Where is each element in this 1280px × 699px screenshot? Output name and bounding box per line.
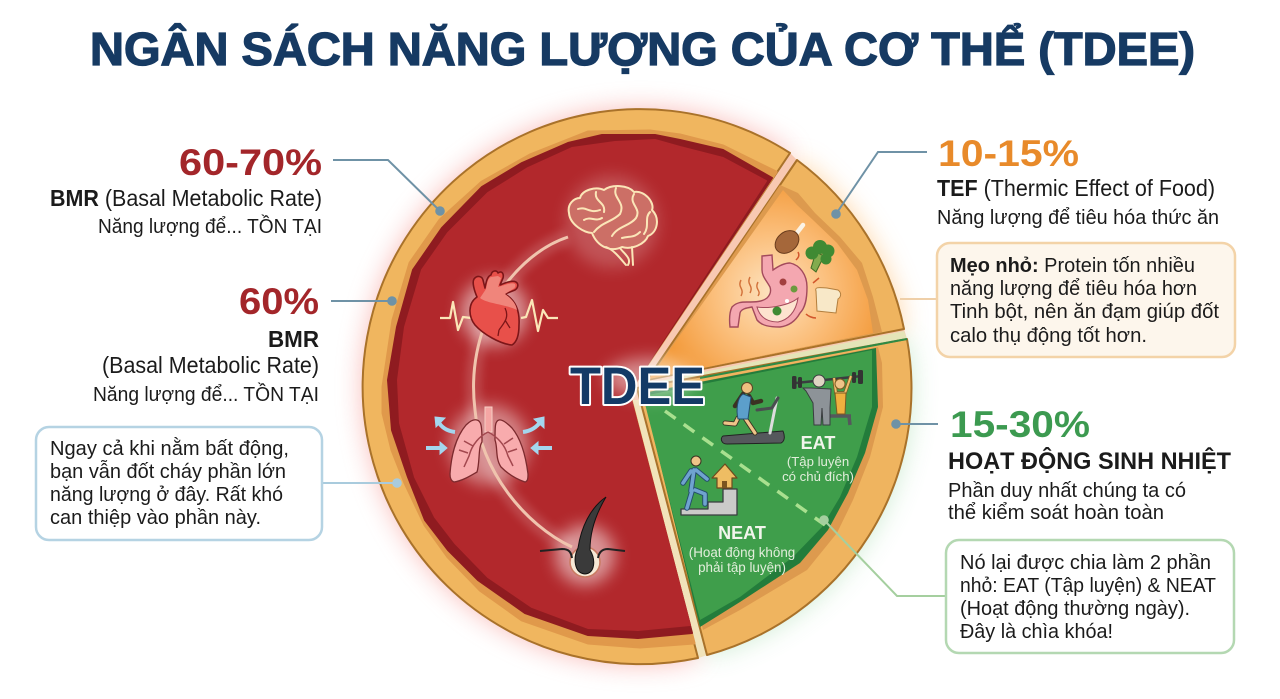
slice: BMR red [363,109,790,664]
callout: blue: can thiệp vào phần này. [50,506,261,529]
callout: orange: Mẹo nhỏ: Protein tốn nhiều [950,254,1195,277]
label: NEAT: (Hoạt động không [689,545,795,560]
icon: lungs [426,407,552,482]
text block: 60-70% BMR [50,141,322,238]
text block: 60-70% BMR: Năng lượng để... TỒN TẠI [98,214,322,238]
callout: orange [937,243,1235,357]
bread [816,288,841,313]
connector: blue box [322,479,401,487]
label: NEAT: NEAT [718,523,766,543]
callout: orange: năng lượng để tiêu hóa hơn [950,277,1197,300]
connector: 10-15% [832,152,927,218]
divider: EAT and NEAT [665,411,825,525]
icon: person on stairs [681,456,737,515]
text block: 10-15% TEF [937,132,1219,229]
slice gaps [629,153,907,658]
text block: 15-30% activity: thể kiểm soát hoàn toàn [948,501,1164,524]
slice: TEF orange [647,160,904,380]
connector: green box [820,516,946,596]
icon: heart with pulse [440,271,558,345]
icon: air arrows [426,417,552,454]
label: NEAT: phải tập luyện) [698,560,786,575]
label: EAT [782,433,854,484]
stomach [730,255,807,327]
callout: blue: Ngay cả khi nằm bất động, [50,437,289,460]
text block: 10-15% TEF: 10-15% [938,132,1079,174]
callout: green: Nó lại được chia làm 2 phần [960,551,1211,574]
label: EAT: có chủ đích) [782,469,854,484]
text block: 60% BMR: (Basal Metabolic Rate) [102,352,319,378]
center label: TDEE: TDEE [570,357,705,416]
text block: 60-70% BMR: BMR (Basal Metabolic Rate) [50,185,322,211]
icon: brain [569,186,657,265]
text block: 60% BMR: BMR [268,326,319,352]
background glow [363,109,911,664]
text block: 15-30% activity [948,403,1231,524]
callout: green: Đây là chìa khóa! [960,620,1113,643]
icon: food and stomach [730,225,841,327]
icon: hair follicle [540,497,625,577]
icon: treadmill runner [721,382,784,444]
icon: weight lifters [792,370,863,425]
chicken leg [771,225,803,258]
connector: orange box [900,298,937,300]
callout: orange: calo thụ động tốt hơn. [950,324,1147,347]
connector: 60% [331,297,396,305]
pizza chart [363,109,911,664]
callout: green: (Hoạt động thường ngày). [960,597,1190,620]
text block: 60% BMR: Năng lượng để... TỒN TẠI [93,382,319,406]
text block: 15-30% activity: Phần duy nhất chúng ta có [948,479,1186,502]
callout: blue: năng lượng ở đây. Rất khó [50,483,283,506]
text block: 60% BMR: 60% [239,280,319,322]
connector: 15-30% [892,420,938,428]
connector: 60-70% [333,160,444,215]
callout: blue: bạn vẫn đốt cháy phần lớn [50,460,286,483]
callout: blue [36,427,322,540]
callout: orange: Tinh bột, nên ăn đạm giúp đốt [950,300,1219,323]
pathway line and glows [449,176,658,585]
text block: 10-15% TEF: Năng lượng để tiêu hóa thức ăn [937,206,1219,229]
title: NGÂN SÁCH NĂNG LƯỢNG CỦA CƠ THỂ (TDEE) [90,23,1195,75]
text block: 15-30% activity: HOẠT ĐỘNG SINH NHIỆT [948,447,1231,475]
text block: 60-70% BMR: 60-70% [179,141,322,183]
callout: green [946,540,1234,653]
text block: 60% BMR [93,280,319,406]
callout: green: nhỏ: EAT (Tập luyện) & NEAT [960,574,1216,597]
text block: 15-30% activity: 15-30% [950,403,1090,445]
label: EAT: EAT [801,433,835,453]
broccoli [806,240,834,272]
slice: activity green [637,339,911,655]
label: EAT: (Tập luyện [787,454,849,469]
text block: 10-15% TEF: TEF (Thermic Effect of Food) [937,175,1215,201]
label: NEAT [689,523,795,575]
